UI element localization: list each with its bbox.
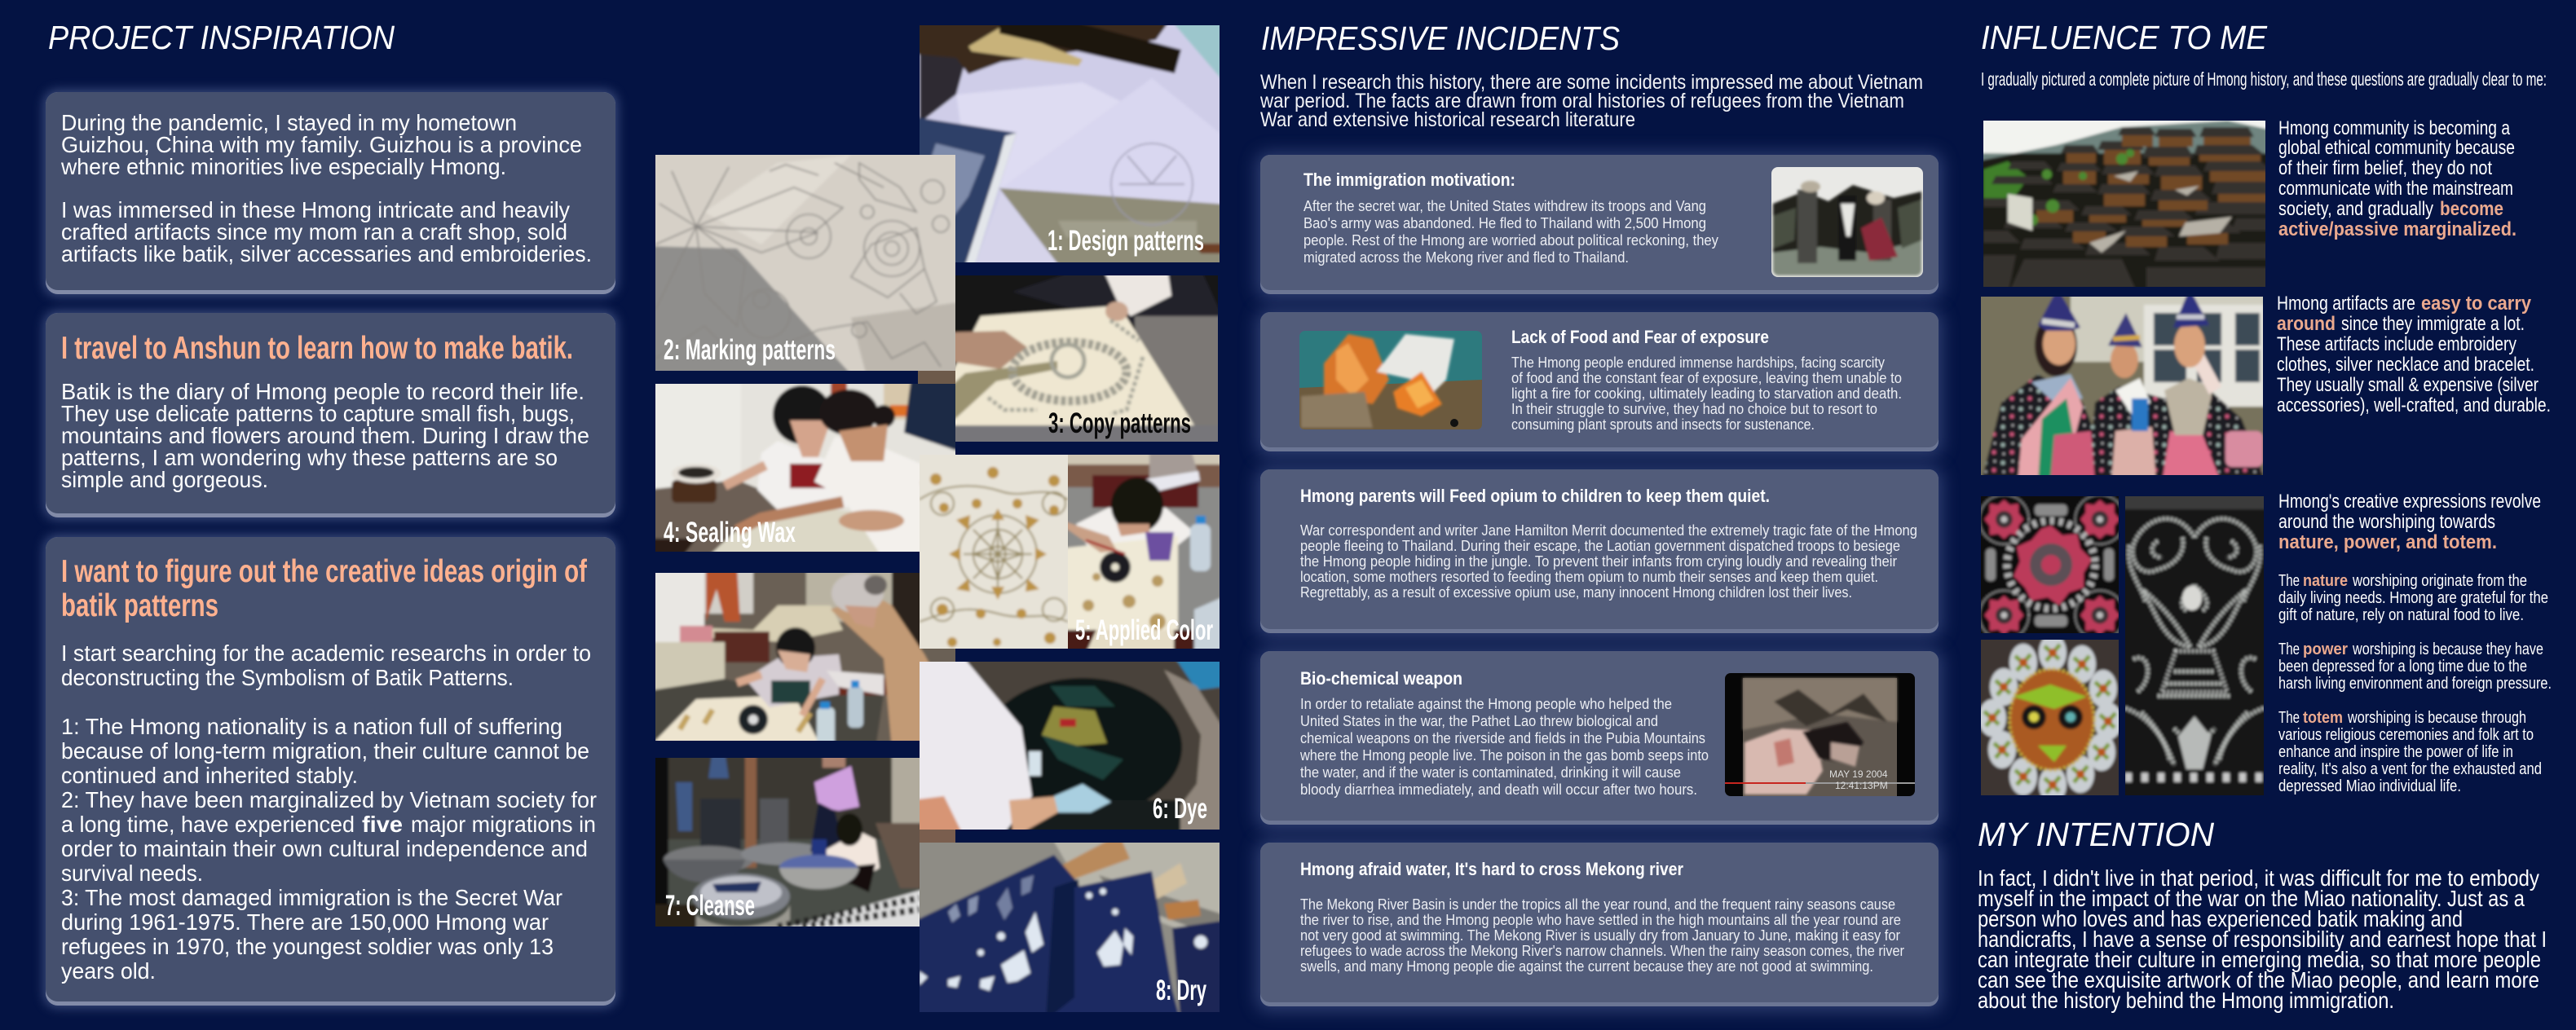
intro paragraph: When I research this history, there are some incidents impressed me about Vietnam <box>1260 71 1923 94</box>
photo: batik pink mandala <box>1981 496 2119 633</box>
photo: dry <box>920 843 1220 1012</box>
panel: creative ideas origin: deconstructing the Symbolism of Batik Patterns. <box>61 665 514 690</box>
photo: sealing wax <box>655 384 955 552</box>
label: step 6: 6: Dye <box>1153 793 1207 825</box>
text: community: become <box>2440 198 2503 220</box>
card: Mekong river: Hmong afraid water, It's hard to cross Mekong river <box>1300 859 1683 879</box>
label: step 2: 2: Marking patterns <box>664 334 836 366</box>
card: Mekong river: The Mekong River Basin is under the tropics all the year round, and the frequent rainy seasons cause <box>1300 896 1895 913</box>
card: opium: Regrettably, as a result of excessive opium use, many innocent Hmong children lost their lives. <box>1300 583 1852 601</box>
panel: travel to Anshun: They use delicate patterns to capture small fish, bugs, <box>61 401 575 426</box>
text: creative expressions: nature, power, and totem. <box>2278 531 2497 553</box>
card: opium: War correspondent and writer Jane Hamilton Merrit documented the extremely tragic fate of the Hmong <box>1300 522 1917 539</box>
heading: project inspiration: PROJECT INSPIRATION <box>48 19 395 56</box>
card: bio-chemical weapon: the water, and if the water is contaminated, drinking it will cause <box>1300 764 1681 781</box>
panel: creative ideas origin: batik patterns <box>61 588 218 623</box>
text: creative expressions: nature <box>2303 571 2348 590</box>
text: community: active/passive marginalized. <box>2278 218 2516 240</box>
panel: creative ideas origin <box>44 535 617 1007</box>
panel: creative ideas origin: continued and inherited stably. <box>61 763 358 788</box>
panel: hometown background: Guizhou, China with my family. Guizhou is a province <box>61 132 582 157</box>
card: bio-chemical weapon: chemical weapons on the riverside and fields in the Pubia Mountains <box>1300 729 1705 746</box>
column: influence to me <box>1973 19 2552 1013</box>
photo: Hmong village <box>1983 121 2265 287</box>
label: step 7: 7: Cleanse <box>665 890 755 922</box>
card: Mekong river: refugees to wade across the Mekong River's narrow channels. When the rainy season comes, the river <box>1300 942 1904 959</box>
panel: creative ideas origin: major migrations in <box>411 812 596 837</box>
text: my intention: person who loves and has experienced batik making and <box>1978 906 2463 931</box>
text: creative expressions: The <box>2278 640 2300 658</box>
panel: hometown background: artifacts like batik, silver accessaries and embroideries. <box>61 241 592 266</box>
card: immigration motivation: After the secret war, the United States withdrew its troops and Vang <box>1303 197 1706 214</box>
panel: travel to Anshun <box>44 311 617 519</box>
card: immigration motivation: The immigration motivation: <box>1303 169 1515 190</box>
photo: cleanse <box>655 758 955 927</box>
card: immigration motivation <box>1257 153 1942 298</box>
text: creative expressions: gift of nature, rely on natural food to live. <box>2278 605 2524 624</box>
card: bio-chemical weapon: United States in the war, the Pathet Lao threw biological and <box>1300 712 1658 729</box>
photo: video still <box>1725 673 1915 796</box>
card: opium: people fleeing to Thailand. During their escape, the Laotian government dispatched troops to besiege <box>1300 537 1900 554</box>
text: my intention: about the history behind the Hmong immigration. <box>1978 988 2394 1013</box>
card: immigration motivation: people. Rest of the Hmong are worried about political reckoning, they <box>1303 231 1719 249</box>
photo: marking patterns <box>655 155 955 371</box>
intro paragraph <box>1259 71 1923 131</box>
photo: explosions <box>1299 331 1482 429</box>
text: artifacts <box>2277 293 2551 416</box>
panel: hometown background <box>44 90 617 296</box>
text: creative expressions: The <box>2278 708 2300 727</box>
text: creative expressions: totem <box>2303 708 2343 727</box>
card: opium <box>1257 468 1942 637</box>
card: bio-chemical weapon <box>1257 649 1942 829</box>
panel: creative ideas origin: because of long-term migration, their culture cannot be <box>61 738 589 764</box>
text: my intention <box>1978 865 2547 1013</box>
label: step 3: 3: Copy patterns <box>1048 407 1191 439</box>
photo: design patterns <box>920 25 1220 262</box>
text: creative expressions: The <box>2278 571 2300 590</box>
panel: creative ideas origin: five <box>362 812 403 837</box>
card: lack of food: of food and the constant fear of exposure, leaving them unable to <box>1511 369 1902 386</box>
photo: applying colour with teacher <box>655 573 955 741</box>
intro paragraph: war period. The facts are drawn from oral histories of refugees from the Vietnam <box>1259 90 1904 112</box>
card: lack of food: In their struggle to survive, they had no choice but to resort to <box>1511 400 1877 417</box>
card: lack of food <box>1257 310 1942 456</box>
photo: video still: 12:41:13PM <box>1835 780 1888 791</box>
panel: creative ideas origin: 2: They have been marginalized by Vietnam society for <box>61 787 597 812</box>
text: creative expressions: around the worshiping towards <box>2278 511 2495 533</box>
text: community <box>2278 117 2516 240</box>
photo: sliver behind marking pattern <box>918 371 955 387</box>
photo: applied colour pattern <box>920 455 1068 649</box>
text: community: Hmong community is becoming a <box>2278 117 2510 139</box>
panel: hometown background: crafted artifacts since my mom ran a craft shop, sold <box>61 219 567 244</box>
text: creative expressions: worshiping originate from the <box>2352 571 2527 590</box>
text: artifacts: around <box>2277 313 2336 335</box>
panel: creative ideas origin: years old. <box>61 958 156 984</box>
card: bio-chemical weapon: where the Hmong people live. The poison in the gas bomb seeps into <box>1299 746 1709 764</box>
card: lack of food: Lack of Food and Fear of exposure <box>1511 327 1769 347</box>
text: artifacts: Hmong artifacts are <box>2277 293 2415 315</box>
card: lack of food: The Hmong people endured immense hardships, facing scarcity <box>1511 354 1886 371</box>
panel: hometown background: I was immersed in these Hmong intricate and heavily <box>61 197 570 222</box>
card: Mekong river <box>1257 841 1942 1010</box>
text: community: of their firm belief, they do not <box>2278 157 2492 179</box>
photo: soldiers in jungle <box>1771 167 1923 277</box>
text: artifacts: since they immigrate a lot. <box>2341 313 2525 335</box>
panel: hometown background: where ethnic minorities live especially Hmong. <box>60 154 506 179</box>
card: lack of food: consuming plant sprouts and insects for sustenance. <box>1511 416 1815 433</box>
label: step 8: 8: Dry <box>1156 975 1206 1006</box>
panel: creative ideas origin: 3: The most damaged immigration is the Secret War <box>61 885 562 910</box>
card: opium: the Hmong people hiding in the jungle. To prevent their infants from crying loudly and revealing their <box>1300 552 1897 570</box>
panel: creative ideas origin: survival needs. <box>61 861 203 886</box>
panel: travel to Anshun: I travel to Anshun to learn how to make batik. <box>61 331 573 366</box>
text: community: communicate with the mainstream <box>2278 178 2513 200</box>
panel: hometown background: During the pandemic, I stayed in my hometown <box>61 110 517 135</box>
text: community: society, and gradually <box>2278 198 2434 220</box>
panel: travel to Anshun: simple and gorgeous. <box>61 467 268 492</box>
card: Mekong river: not very good at swimming. The Mekong River is usually dry from January to June, making it easy for <box>1300 927 1900 944</box>
panel: creative ideas origin: I start searching for the academic researchs in order to <box>61 640 591 666</box>
text: creative expressions: depressed Miao individual life. <box>2278 777 2461 795</box>
panel: creative ideas origin: I want to figure out the creative ideas origin of <box>61 554 588 589</box>
card: Mekong river: swells, and many Hmong people die against the current because they are not good at swimming. <box>1300 957 1873 975</box>
card: Mekong river: the river to rise, and the Hmong people who have settled in the high mountains all the year round are <box>1300 911 1901 928</box>
photo: video still: MAY 19 2004 <box>1829 768 1888 780</box>
text: creative expressions: power <box>2303 640 2348 658</box>
label: step 1: 1: Design patterns <box>1048 225 1204 257</box>
photo: copy patterns <box>955 275 1218 442</box>
label: step 5: 5: Applied Color <box>1075 614 1213 646</box>
card: immigration motivation: Bao's army was abandoned. He fled to Thailand with 2,500 Hmong <box>1303 214 1706 231</box>
photo: dye <box>920 662 1220 830</box>
card: opium: location, some mothers resorted to feeding them opium to numb their senses and keep them quiet. <box>1300 568 1878 585</box>
card: immigration motivation: migrated across the Mekong river and fled to Thailand. <box>1303 249 1629 266</box>
column: impressive incidents <box>1257 20 1942 1010</box>
card: bio-chemical weapon: In order to retaliate against the Hmong people who helped the <box>1300 695 1672 712</box>
card: opium: Hmong parents will Feed opium to children to keep them quiet. <box>1300 486 1770 506</box>
panel: creative ideas origin: order to maintain their own cultural independence and <box>61 836 588 861</box>
card: bio-chemical weapon: bloody diarrhea immediately, and death will occur after two hours. <box>1300 781 1697 798</box>
card: bio-chemical weapon: Bio-chemical weapon <box>1300 668 1462 689</box>
panel: creative ideas origin: during 1961-1975. There are 150,000 Hmong war <box>61 909 549 935</box>
photo: batik masks <box>1981 640 2119 795</box>
panel: creative ideas origin: refugees in 1970, the youngest soldier was only 13 <box>61 934 554 959</box>
label: step 4: 4: Sealing Wax <box>664 517 796 548</box>
card: lack of food: light a fire for cooking, ultimately leading to starvation and death. <box>1511 385 1902 402</box>
text: artifacts: easy to carry <box>2421 293 2531 315</box>
heading: impressive incidents: IMPRESSIVE INCIDENTS <box>1261 20 1620 57</box>
text: creative expressions: enhance and inspire the power of life in <box>2278 742 2513 761</box>
photo: applying colour close-up <box>1068 455 1220 649</box>
text: creative expressions: worshiping is because through <box>2347 708 2526 727</box>
panel: travel to Anshun: patterns, I am wondering why these patterns are so <box>61 445 558 470</box>
panel: travel to Anshun: mountains and flowers around them. During I draw the <box>61 423 589 448</box>
text: artifacts: These artifacts include embroidery <box>2277 333 2517 355</box>
panel: creative ideas origin: 1: The Hmong nationality is a nation full of suffering <box>61 714 562 739</box>
panel: creative ideas origin: a long time, have experienced <box>61 812 355 837</box>
column: project inspiration <box>44 19 617 1007</box>
text: community: global ethical community because <box>2278 137 2515 159</box>
heading: my intention: MY INTENTION <box>1978 816 2214 853</box>
intro paragraph: War and extensive historical research literature <box>1260 108 1635 131</box>
panel: travel to Anshun: Batik is the diary of Hmong people to record their life. <box>61 379 584 404</box>
photo collage: batik making steps <box>647 17 1228 1020</box>
photo: batik phoenix and goddess <box>2125 496 2264 795</box>
photo: Hmong women <box>1981 297 2263 475</box>
heading: influence to me: INFLUENCE TO ME <box>1981 19 2268 56</box>
text: creative expressions <box>2278 491 2552 795</box>
